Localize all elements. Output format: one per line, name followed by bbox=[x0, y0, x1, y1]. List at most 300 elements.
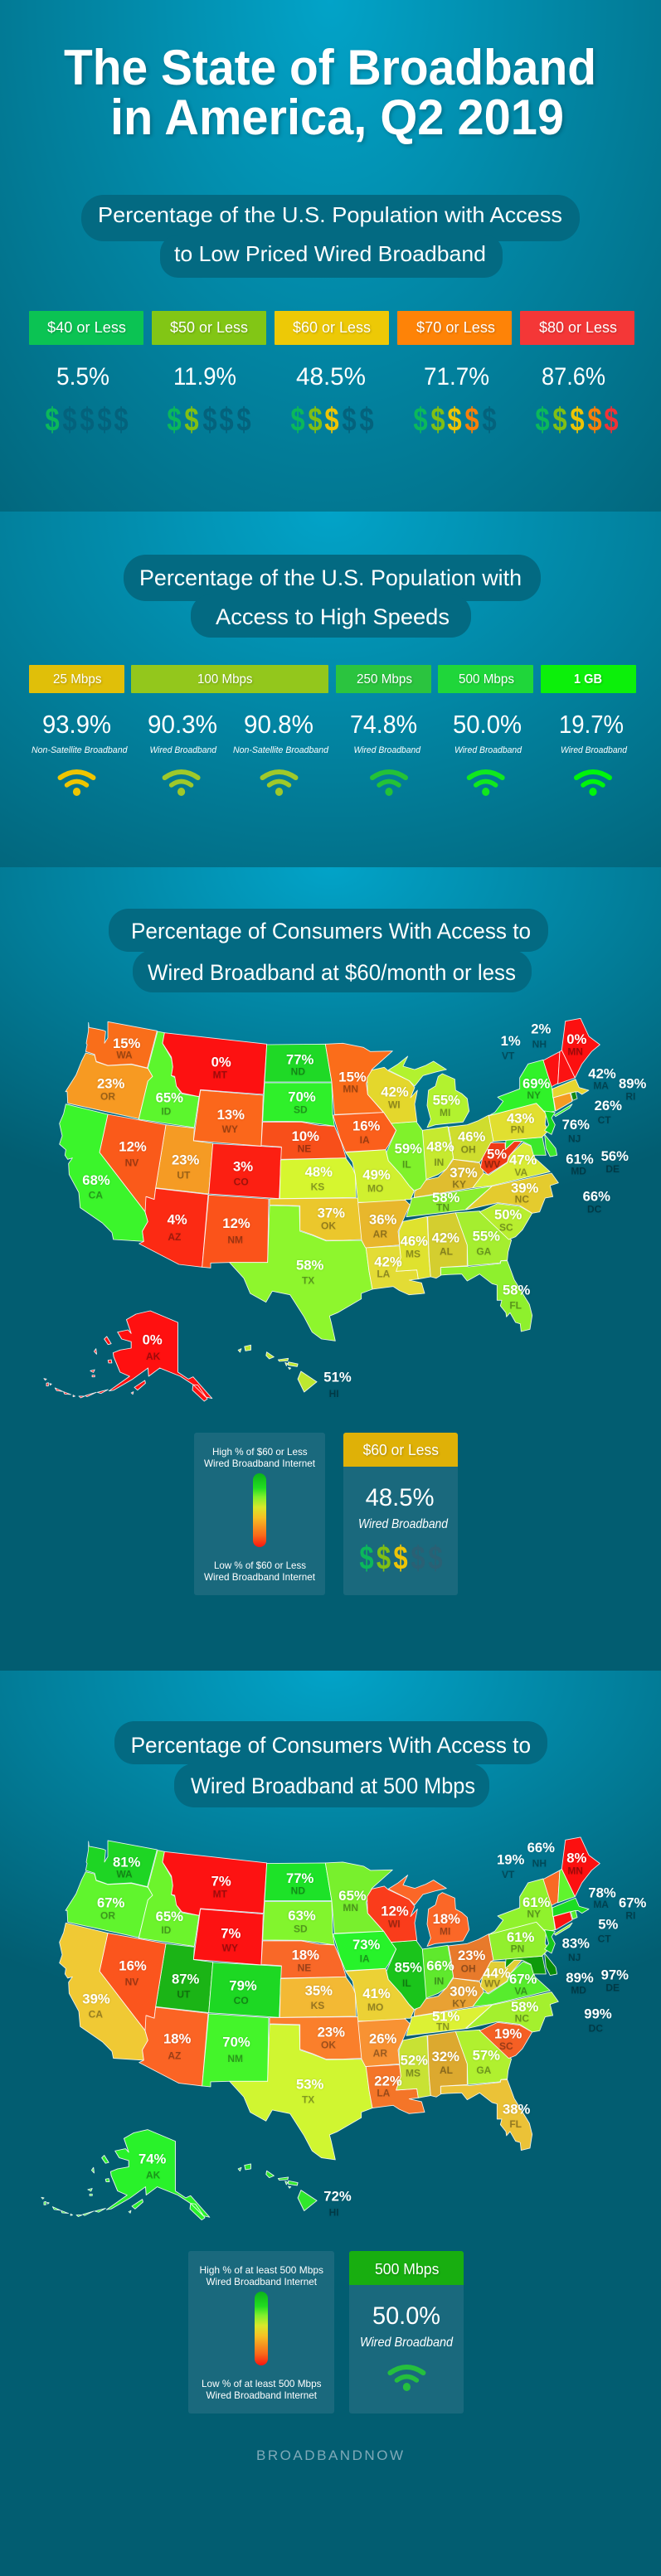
label: MO: 41% bbox=[362, 1986, 391, 2001]
label: CA: 68% bbox=[82, 1172, 110, 1188]
label: VT: 1% bbox=[501, 1033, 521, 1049]
label: TX: TX bbox=[302, 2093, 314, 2105]
label: RI bbox=[619, 1894, 647, 1921]
label: MT: 0% bbox=[211, 1055, 231, 1070]
state: MA bbox=[552, 1079, 589, 1098]
panel: $60 or less callout: $60 or Less bbox=[363, 1442, 439, 1458]
label: OH: OH bbox=[461, 1144, 476, 1156]
label: WV: WV bbox=[484, 1977, 500, 1989]
price bar: $40 or Less: $40 or Less bbox=[47, 319, 126, 336]
label: MS: 52% bbox=[401, 2052, 428, 2068]
label: VT bbox=[501, 1033, 521, 1061]
label: KS: 35% bbox=[305, 1983, 333, 1999]
label: NH bbox=[531, 1021, 552, 1050]
label: WA: WA bbox=[116, 1050, 133, 1061]
label: CT bbox=[595, 1098, 622, 1126]
label: KY: KY bbox=[452, 1179, 466, 1191]
state: NE bbox=[261, 1941, 346, 1978]
label: TX: TX bbox=[302, 1275, 314, 1287]
state: CT bbox=[553, 1912, 572, 1930]
label: NY bbox=[522, 1075, 551, 1101]
label: MT: MT bbox=[213, 1070, 228, 1081]
label: AZ: AZ bbox=[168, 2050, 181, 2062]
label: NH: 66% bbox=[527, 1840, 555, 1856]
label: MS: 46% bbox=[401, 1234, 428, 1249]
label: OH: 23% bbox=[458, 1948, 486, 1963]
state: ID bbox=[139, 1851, 199, 1947]
label: MO bbox=[362, 1986, 391, 2013]
state: IL bbox=[386, 1940, 426, 2010]
label: WV bbox=[484, 1147, 507, 1171]
icon: dollars 4 of 5: $ bbox=[447, 400, 462, 438]
state: SC bbox=[479, 2022, 532, 2059]
label: WI bbox=[381, 1084, 409, 1111]
label: OK: OK bbox=[321, 1220, 336, 1232]
panel: $60 legend bbox=[194, 1433, 325, 1595]
state: MI bbox=[388, 1875, 469, 1947]
label: ME: MN bbox=[567, 1046, 583, 1058]
label: SD: SD bbox=[294, 1104, 308, 1116]
state: AL bbox=[428, 1213, 467, 1278]
state: MN bbox=[325, 1043, 392, 1114]
label: KY: 37% bbox=[450, 1165, 478, 1181]
heading: $60 map bbox=[109, 909, 548, 992]
panel: 500 Mbps callout bbox=[349, 2251, 464, 2413]
price bar: $80 or Less bbox=[520, 311, 634, 345]
state: GA bbox=[455, 2030, 512, 2084]
label: IL: 85% bbox=[395, 1960, 422, 1976]
label: IN: 48% bbox=[426, 1139, 454, 1155]
price bar: $40 or Less bbox=[29, 311, 143, 345]
stat: 74.8% wired bbox=[350, 710, 421, 755]
panel: $60 or less callout: Wired Broadband bbox=[358, 1517, 449, 1531]
label: MI: 18% bbox=[433, 1911, 460, 1927]
panel: $60 or less callout: 48.5% bbox=[366, 1484, 435, 1511]
label: MN: 65% bbox=[338, 1888, 367, 1904]
label: WV bbox=[483, 1965, 511, 1989]
label: OR: 23% bbox=[97, 1076, 125, 1092]
price bar: $60 or Less bbox=[275, 311, 389, 345]
price bar: $80 or Less: $80 or Less bbox=[539, 319, 617, 336]
label: NV: 16% bbox=[119, 1957, 147, 1973]
label: WI bbox=[381, 1903, 409, 1929]
icon: dollars 5 of 5: $ bbox=[552, 400, 567, 438]
state: NM bbox=[202, 1195, 269, 1268]
icon: dollars 3 of 5: $ bbox=[342, 400, 357, 438]
state: OH bbox=[449, 1934, 493, 1981]
label: UT: UT bbox=[177, 1170, 191, 1181]
label: PN bbox=[507, 1929, 535, 1954]
label: ME: 0% bbox=[566, 1031, 587, 1047]
stat: 71.7%: 71.7% bbox=[424, 363, 489, 391]
state: MO bbox=[346, 1150, 414, 1204]
icon: wifi 1 GB bbox=[576, 772, 610, 796]
state: NY bbox=[488, 1060, 572, 1117]
stat: 90.3% wired: Wired Broadband bbox=[149, 745, 217, 755]
icon: dollars 1 of 5 bbox=[45, 400, 129, 438]
label: NY: 69% bbox=[522, 1075, 551, 1091]
Alaska and Hawaii shapes bbox=[44, 1311, 317, 1401]
price bar: $60 or Less: $60 or Less bbox=[293, 319, 371, 336]
label: WI: 42% bbox=[381, 1084, 409, 1100]
stat: 50.0% wired bbox=[453, 710, 522, 755]
label: KY: 30% bbox=[450, 1984, 478, 2000]
label: CO: CO bbox=[234, 1995, 249, 2006]
speed bar: 100 Mbps bbox=[131, 665, 328, 693]
stat: 74.8% wired: 74.8% bbox=[350, 710, 417, 739]
panel: $60 or less callout bbox=[343, 1433, 458, 1595]
state: CO bbox=[209, 1962, 281, 2017]
section background: 500 Mbps map bbox=[0, 1671, 661, 2576]
label: PN: PN bbox=[511, 1943, 524, 1954]
label: KY bbox=[450, 1984, 478, 2009]
label: TN bbox=[432, 1190, 460, 1214]
heading: high speeds bbox=[124, 555, 541, 638]
panel: high speeds bbox=[29, 555, 636, 796]
state: NJ bbox=[545, 1930, 555, 1953]
label: CA bbox=[82, 1991, 110, 2020]
state: HI bbox=[238, 1345, 317, 1392]
speed bar: 500 Mbps: 500 Mbps bbox=[459, 672, 514, 686]
label: CT: 5% bbox=[598, 1917, 619, 1933]
section background: high speeds bbox=[0, 512, 661, 867]
label: NV: NV bbox=[125, 1157, 139, 1169]
label: AL: AL bbox=[440, 2064, 453, 2076]
label: CT: CT bbox=[598, 1933, 611, 1945]
stat: 19.7% wired: Wired Broadband bbox=[561, 745, 628, 755]
label: ID: ID bbox=[161, 1105, 172, 1117]
label: IL: IL bbox=[402, 1977, 411, 1989]
stat: 19.7% wired: 19.7% bbox=[559, 710, 624, 739]
label: ID: 65% bbox=[156, 1089, 183, 1105]
label: VT bbox=[497, 1852, 525, 1880]
state: ID bbox=[139, 1031, 199, 1128]
label: NY bbox=[522, 1894, 551, 1920]
state: DE bbox=[545, 1953, 557, 1976]
label: AZ: AZ bbox=[168, 1231, 181, 1243]
state: LA bbox=[366, 1246, 425, 1295]
icon: dollars 5 of 5: $ bbox=[535, 400, 550, 438]
label: DE: 56% bbox=[601, 1148, 629, 1164]
label: NE bbox=[292, 1948, 319, 1973]
state: KY bbox=[414, 1978, 484, 2016]
label: MO: MO bbox=[367, 2001, 383, 2013]
label: FL bbox=[503, 2101, 531, 2130]
label: HI: HI bbox=[329, 1388, 339, 1400]
label: RI: RI bbox=[625, 1091, 635, 1103]
label: TN: TN bbox=[436, 2021, 450, 2032]
label: NE: NE bbox=[298, 1143, 311, 1155]
label: RI: 89% bbox=[619, 1076, 647, 1092]
state: SD bbox=[263, 1083, 334, 1126]
label: VT: VT bbox=[502, 1869, 515, 1880]
label: LA: 22% bbox=[374, 2073, 402, 2088]
state: NJ bbox=[545, 1111, 555, 1134]
label: CO: 79% bbox=[229, 1977, 257, 1993]
label: WY: 13% bbox=[217, 1107, 245, 1123]
label: MA: 42% bbox=[588, 1066, 616, 1082]
stat: 90.8% non-satellite bbox=[233, 710, 329, 755]
label: AL: 32% bbox=[432, 2049, 459, 2064]
label: MO: MO bbox=[367, 1182, 383, 1194]
east value labels bbox=[338, 1021, 647, 1311]
state: NM bbox=[202, 2014, 269, 2087]
label: DE: 97% bbox=[601, 1967, 629, 1983]
label: NV: NV bbox=[125, 1976, 139, 1987]
state: HI bbox=[238, 2164, 317, 2211]
label: HI bbox=[323, 1370, 352, 1400]
state: TX bbox=[230, 1206, 372, 1341]
state: WA bbox=[85, 1021, 157, 1068]
label: NE: NE bbox=[298, 1962, 311, 1973]
state: CA bbox=[60, 1923, 148, 2060]
label: AR: AR bbox=[373, 1229, 387, 1240]
state: MT bbox=[163, 1851, 267, 1915]
label: NC: 39% bbox=[511, 1180, 539, 1196]
label: SC: 19% bbox=[494, 2025, 522, 2041]
state: ND bbox=[265, 1044, 332, 1082]
label: MT bbox=[211, 1055, 231, 1081]
heading: high speeds: Access to High Speeds bbox=[216, 604, 450, 629]
label: KS: KS bbox=[311, 1181, 324, 1192]
label: ID bbox=[156, 1909, 183, 1936]
label: AK: AK bbox=[146, 2170, 161, 2181]
label: DE: DE bbox=[605, 1163, 620, 1175]
label: ID: 65% bbox=[156, 1909, 183, 1924]
label: IL: IL bbox=[402, 1158, 411, 1170]
label: NH: 2% bbox=[531, 1021, 552, 1036]
stat: 11.9%: 11.9% bbox=[173, 363, 236, 391]
state: MO bbox=[346, 1968, 414, 2022]
state: TN bbox=[406, 2005, 492, 2035]
label: NJ: 76% bbox=[562, 1117, 590, 1133]
label: MD: 89% bbox=[566, 1970, 594, 1986]
icon: dollars 5 of 5: $ bbox=[587, 400, 602, 438]
state: NH bbox=[558, 1050, 575, 1084]
label: OR bbox=[97, 1894, 125, 1921]
label: DC: 66% bbox=[583, 1188, 610, 1204]
state: WI bbox=[367, 1886, 417, 1943]
state: AK bbox=[41, 2130, 210, 2220]
state: ME bbox=[561, 1837, 600, 1897]
state: NV bbox=[100, 1114, 166, 1212]
state: OR bbox=[66, 1053, 153, 1118]
label: SD: 70% bbox=[288, 1089, 316, 1104]
label: CT: CT bbox=[598, 1114, 611, 1126]
label: NJ bbox=[562, 1936, 590, 1963]
label: MA bbox=[588, 1066, 616, 1091]
label: NE: 10% bbox=[292, 1128, 319, 1144]
label: MI: MI bbox=[440, 1107, 450, 1118]
label: MD bbox=[566, 1151, 594, 1177]
state: AR bbox=[358, 2019, 410, 2067]
icon: dollars 3 of 5: $ bbox=[290, 400, 305, 438]
state: WV bbox=[480, 1142, 522, 1175]
speed bar: 1 GB: 1 GB bbox=[574, 672, 602, 686]
label: SC: SC bbox=[499, 1221, 513, 1233]
label: NH: NH bbox=[532, 1039, 547, 1050]
state: CT bbox=[553, 1093, 572, 1111]
label: UT bbox=[172, 1971, 200, 2000]
label: PN bbox=[507, 1110, 535, 1136]
state: OK bbox=[270, 1198, 362, 1240]
icon: dollars 5 of 5: $ bbox=[570, 400, 585, 438]
label: MA bbox=[588, 1885, 616, 1910]
section background: low priced broadband bbox=[0, 0, 661, 512]
state: AL bbox=[428, 2031, 467, 2097]
label: DC: DC bbox=[589, 2022, 603, 2034]
icon: dollars 1 of 5: $ bbox=[62, 400, 77, 438]
label: MD: 61% bbox=[566, 1151, 594, 1167]
label: WI: 12% bbox=[381, 1903, 409, 1919]
state: SD bbox=[263, 1902, 334, 1945]
legend colour scale bbox=[253, 1473, 266, 1547]
speed bar: 500 Mbps bbox=[438, 665, 533, 693]
label: GA: GA bbox=[476, 1245, 492, 1257]
label: NJ: NJ bbox=[568, 1133, 581, 1144]
label: GA bbox=[473, 2047, 500, 2076]
icon: dollars: $ bbox=[377, 1539, 391, 1576]
label: DC: DC bbox=[587, 1204, 602, 1215]
heading: 500 Mbps map: Percentage of Consumers With Access to bbox=[131, 1733, 531, 1758]
label: WV: 44% bbox=[483, 1965, 511, 1981]
label: KS bbox=[305, 1164, 333, 1192]
west state shapes bbox=[60, 1841, 372, 2160]
label: NE bbox=[292, 1128, 319, 1155]
label: CA: CA bbox=[89, 1190, 103, 1201]
footer logo text: BROADBANDNOW bbox=[256, 2447, 403, 2463]
state: WY bbox=[193, 1090, 263, 1146]
label: FL: 58% bbox=[503, 1283, 531, 1298]
label: AL: 42% bbox=[432, 1230, 459, 1245]
panel: low priced wired broadband bbox=[29, 195, 634, 438]
label: HI: 51% bbox=[323, 1370, 352, 1385]
label: RI: 67% bbox=[619, 1894, 647, 1910]
map: $60 or less by state bbox=[44, 1018, 647, 1401]
state: MD bbox=[505, 1138, 546, 1155]
label: NH: NH bbox=[532, 1857, 547, 1869]
label: AZ bbox=[168, 1212, 187, 1243]
label: ID: ID bbox=[161, 1924, 172, 1936]
label: WV: 5% bbox=[487, 1147, 507, 1162]
state: VA bbox=[473, 1142, 550, 1188]
icon: dollars: $ bbox=[393, 1539, 408, 1576]
Hawaii shape bbox=[238, 2164, 317, 2211]
label: ND: 77% bbox=[286, 1870, 314, 1886]
label: ME bbox=[566, 1031, 587, 1058]
title: in America, Q2 2019 bbox=[110, 90, 564, 145]
stat: 90.8% non-satellite: 90.8% bbox=[244, 710, 313, 739]
icon: dollars 4 of 5: $ bbox=[482, 400, 497, 438]
panel: 500 Mbps callout: 50.0% bbox=[372, 2302, 440, 2330]
label: MD: MD bbox=[571, 1984, 586, 1996]
label: OK bbox=[318, 1206, 345, 1232]
icon: dollars 3 of 5: $ bbox=[308, 400, 323, 438]
label: MS bbox=[401, 1234, 428, 1260]
label: PN: 43% bbox=[507, 1110, 535, 1126]
label: MA: MA bbox=[593, 1079, 609, 1091]
icon: wifi 100 Mbps b bbox=[262, 772, 295, 796]
label: NC: NC bbox=[515, 1194, 529, 1206]
icon: dollars 2 of 5: $ bbox=[202, 400, 217, 438]
state: RI bbox=[571, 1910, 577, 1919]
state: AK bbox=[44, 1311, 212, 1401]
label: GA: 57% bbox=[473, 2047, 500, 2063]
label: MI: MI bbox=[440, 1926, 450, 1938]
icon: dollars: $ bbox=[411, 1539, 425, 1576]
east state shapes bbox=[325, 1837, 600, 2151]
label: FL: 38% bbox=[503, 2101, 531, 2117]
label: WY bbox=[221, 1926, 241, 1954]
label: OK bbox=[318, 2024, 345, 2050]
label: LA bbox=[374, 2073, 402, 2098]
label: AK bbox=[143, 1332, 163, 1362]
state: MT bbox=[163, 1033, 267, 1097]
label: ND: ND bbox=[291, 1066, 305, 1078]
label: AK: 0% bbox=[143, 1332, 163, 1348]
label: MA: 78% bbox=[588, 1885, 616, 1900]
label: GA bbox=[473, 1229, 500, 1257]
heading: low priced bbox=[81, 195, 580, 278]
label: LA: LA bbox=[377, 1269, 391, 1280]
icon: wifi 500 Mbps bbox=[469, 772, 503, 796]
section background: $60 map bbox=[0, 867, 661, 1671]
label: OK: 37% bbox=[318, 1206, 345, 1221]
label: WA: WA bbox=[116, 1868, 133, 1880]
label: NJ: NJ bbox=[568, 1952, 581, 1963]
label: CO: 3% bbox=[233, 1159, 253, 1175]
label: MI: 55% bbox=[433, 1092, 460, 1108]
label: CO bbox=[233, 1159, 253, 1187]
label: MN: MN bbox=[343, 1083, 358, 1094]
label: TN bbox=[432, 2009, 460, 2032]
label: TN: 51% bbox=[432, 2009, 460, 2025]
label: IA: IA bbox=[360, 1134, 370, 1146]
label: DC bbox=[584, 2006, 612, 2034]
label: IL bbox=[395, 1141, 422, 1170]
label: DC bbox=[583, 1188, 610, 1215]
label: NY: 61% bbox=[522, 1894, 551, 1910]
state: IA bbox=[333, 1113, 396, 1152]
stat: 93.9% non-satellite: 93.9% bbox=[42, 710, 111, 739]
state: AZ bbox=[139, 2007, 208, 2086]
heading: low priced: to Low Priced Wired Broadband bbox=[174, 241, 486, 266]
label: IL: 59% bbox=[395, 1141, 422, 1157]
label: MA: MA bbox=[593, 1899, 609, 1910]
icon: dollars 4 of 5 bbox=[413, 400, 497, 438]
state: KS bbox=[279, 1977, 356, 2017]
label: IN: IN bbox=[434, 1976, 444, 1987]
panel: $60 legend: High % of $60 or Less bbox=[212, 1446, 308, 1458]
state: SC bbox=[479, 1204, 532, 1239]
label: OH bbox=[458, 1128, 486, 1156]
label: NM: 70% bbox=[222, 2035, 250, 2050]
state: VT bbox=[543, 1051, 560, 1087]
label: NV bbox=[119, 1957, 147, 1987]
heading: $60 map: Percentage of Consumers With Access to bbox=[131, 919, 531, 944]
icon: wifi 250 Mbps bbox=[372, 772, 406, 796]
icon: wifi 25 Mbps bbox=[60, 772, 93, 796]
heading: $60 map: Wired Broadband at $60/month or less bbox=[148, 960, 516, 985]
label: VA: VA bbox=[514, 1986, 528, 1997]
label: SC bbox=[494, 2025, 522, 2052]
label: ID bbox=[156, 1089, 183, 1117]
state: IN bbox=[422, 1945, 454, 1998]
state: NC bbox=[466, 1173, 558, 1213]
state: KY bbox=[414, 1159, 484, 1197]
state: MD bbox=[505, 1956, 546, 1974]
label: NH bbox=[527, 1840, 555, 1869]
